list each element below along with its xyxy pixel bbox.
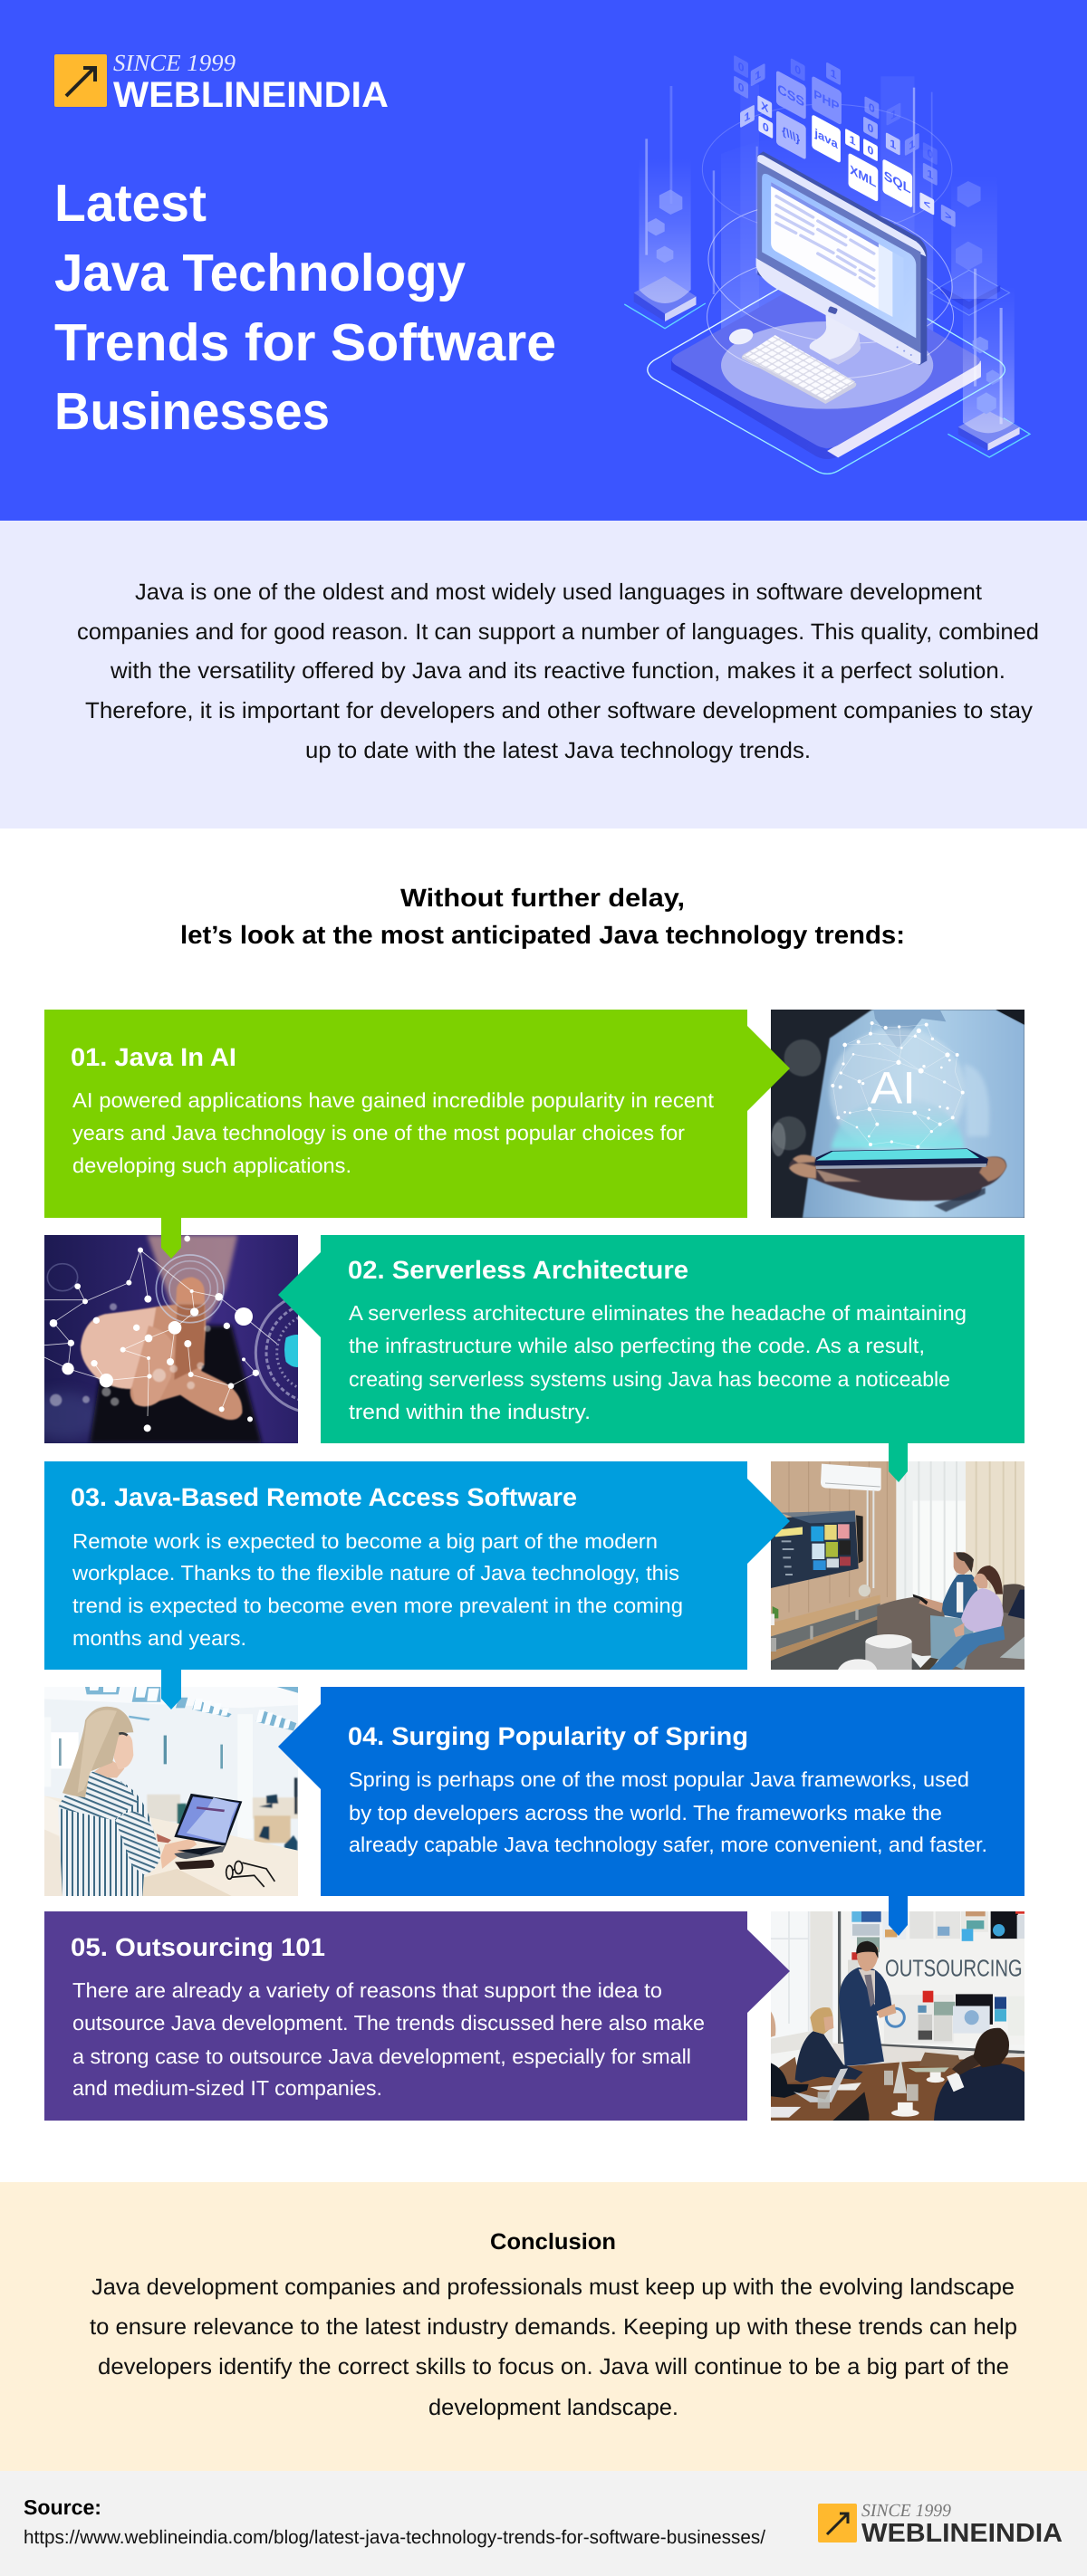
floating code tiles: CSS [777, 81, 804, 110]
panel: 01 Java In AI: developing such applications. [72, 1154, 351, 1177]
light rings [697, 104, 964, 378]
panel: 05 Outsourcing 101: outsource Java development. The trends discussed here also make [72, 2011, 705, 2035]
panel: 01 Java In AI: years and Java technology is one of the most popular choices for [72, 1121, 685, 1144]
intro text: Therefore, it is important for developers and other software development companies to stay [85, 698, 1034, 723]
floating code tiles: {\\\} [782, 124, 800, 146]
panel: 04 Surging Popularity of Spring: already capable Java technology safer, more convenient, and faster. [349, 1833, 987, 1856]
section heading: let’s look at the most anticipated Java technology trends: [180, 921, 905, 949]
title: Java Technology [54, 244, 466, 302]
title: Businesses [54, 382, 330, 441]
panel: 01 Java In AI: 01. Java In AI [71, 1043, 236, 1071]
floating code tiles: 1 [890, 107, 897, 122]
panel: conclusion: Java development companies and professionals must keep up with the evolving landscape [91, 2274, 1015, 2300]
floating code tiles: 0 [869, 100, 875, 116]
floating code tiles: 1 [745, 109, 750, 124]
panel: 04 Surging Popularity of Spring: by top developers across the world. The frameworks make the [349, 1801, 942, 1824]
panel: 04 Surging Popularity of Spring [278, 1687, 1024, 1936]
floating code tiles [734, 55, 956, 227]
floating code tiles: < [924, 196, 930, 212]
floating code tiles: java [814, 126, 838, 151]
logo: Webline India [54, 50, 389, 115]
platform outline [648, 288, 1005, 474]
panel: 02 Serverless Architecture: A serverless architecture eliminates the headache of maintaining [349, 1301, 967, 1325]
platform [671, 279, 981, 459]
panel: 05 Outsourcing 101: a strong case to outsource Java development, especially for small [72, 2045, 691, 2068]
floating code tiles: 1 [755, 67, 761, 83]
panel: 03 Java-Based Remote Access Software: workplace. Thanks to the flexible nature of Java technology, this [72, 1561, 679, 1585]
floating code tiles: 0 [868, 142, 873, 158]
photo: outsourcing business meeting [771, 1911, 1024, 2121]
panel: conclusion: to ensure relevance to the latest industry demands. Keeping up with these trends can help [90, 2314, 1017, 2340]
title [54, 174, 556, 441]
large glass column behind the monitor [721, 133, 933, 409]
intro text: companies and for good reason. It can support a number of languages. This quality, combined [77, 619, 1039, 645]
floating code tiles: 0 [927, 146, 933, 161]
panel: 01 Java In AI [44, 1010, 790, 1259]
floating code tiles: 0 [738, 59, 745, 74]
title: Latest [54, 174, 207, 233]
photo: couple watching smart TV [771, 1461, 1024, 1670]
panel: 02 Serverless Architecture: trend within the industry. [349, 1400, 591, 1423]
panel: 03 Java-Based Remote Access Software: 03. Java-Based Remote Access Software [71, 1483, 577, 1511]
panel: 03 Java-Based Remote Access Software: Remote work is expected to become a big part of the modern [72, 1529, 658, 1553]
section heading: Without further delay, [400, 884, 685, 912]
panel: 04 Surging Popularity of Spring: 04. Surging Popularity of Spring [348, 1722, 748, 1750]
panel: conclusion: development landscape. [428, 2395, 678, 2420]
intro text: with the versatility offered by Java and its reactive function, makes it a perfect solution. [110, 658, 1005, 684]
logo: Webline India: SINCE 1999 [113, 50, 236, 76]
front right pylon [948, 269, 1030, 457]
panel: 02 Serverless Architecture [278, 1235, 1024, 1482]
photo: hand holding tablet with AI hologram [771, 1010, 1024, 1218]
panel: 02 Serverless Architecture: the infrastructure while also perfecting the code. As a result, [349, 1334, 925, 1357]
footer logo: SINCE 1999 [861, 2501, 951, 2521]
panel: conclusion: Conclusion [490, 2229, 616, 2255]
intro text [77, 579, 1039, 763]
panel: 03 Java-Based Remote Access Software: months and years. [72, 1626, 246, 1650]
floating code tiles: PHP [813, 87, 840, 114]
panel: 03 Java-Based Remote Access Software [44, 1461, 790, 1709]
photo: hand holding tablet with AI hologram: AI [871, 1062, 916, 1113]
panel: 02 Serverless Architecture: 02. Serverless Architecture [348, 1256, 688, 1284]
floating code tiles: 1 [927, 167, 933, 182]
floating code tiles: 1 [890, 136, 896, 152]
section heading [180, 884, 905, 949]
footer logo: WEBLINEINDIA [861, 2519, 1063, 2548]
title: Trends for Software [54, 313, 556, 372]
panel: 04 Surging Popularity of Spring: Spring is perhaps one of the most popular Java frameworks, used [349, 1767, 969, 1791]
monitor stand [810, 312, 861, 365]
photo: finger touching network [24, 1235, 377, 1443]
floating code tiles: XML [850, 163, 876, 190]
panel: footer source [0, 2471, 1087, 2576]
mouse [727, 326, 755, 347]
panel: footer source: https://www.weblineindia.com/blog/latest-java-technology-trends-for-software-businesses/ [24, 2527, 765, 2548]
panel: conclusion [0, 2182, 1087, 2471]
panel: 05 Outsourcing 101: There are already a variety of reasons that support the idea to [72, 1978, 662, 2002]
left pylon [624, 86, 706, 329]
keyboard [742, 335, 856, 404]
floating code tiles: 0 [763, 120, 769, 135]
panel: 02 Serverless Architecture: creating serverless systems using Java has become a noticeable [349, 1367, 950, 1391]
floating code tiles: 0 [868, 120, 873, 136]
panel: conclusion: developers identify the correct skills to focus on. Java will continue to be a big part of the [98, 2354, 1009, 2380]
back right pylon [930, 175, 1010, 315]
photo: woman working on laptop [44, 1687, 298, 1896]
floating code tiles: 1 [909, 137, 915, 152]
floating code tiles: X [761, 99, 768, 115]
footer logo [818, 2501, 1063, 2548]
floating code tiles: 0 [794, 62, 801, 78]
floating code tiles: SQL [884, 168, 910, 196]
panel: 05 Outsourcing 101: and medium-sized IT companies. [72, 2076, 382, 2100]
intro text: up to date with the latest Java technology trends. [305, 738, 811, 763]
floating code tiles: 1 [831, 66, 836, 81]
panel: 05 Outsourcing 101: 05. Outsourcing 101 [71, 1933, 325, 1961]
panel: 01 Java In AI: AI powered applications have gained incredible popularity in recent [72, 1088, 715, 1112]
floating code tiles: > [945, 208, 951, 224]
floating code tiles: 1 [850, 132, 855, 148]
panel: 05 Outsourcing 101 [44, 1911, 790, 2121]
header band [0, 0, 1087, 521]
panel: 03 Java-Based Remote Access Software: trend is expected to become even more prevalent in the coming [72, 1594, 683, 1617]
monitor [756, 151, 927, 365]
intro text: Java is one of the oldest and most widely used languages in software development [135, 579, 982, 605]
logo: Webline India: WEBLINEINDIA [113, 75, 389, 115]
illustration: isometric computer with floating code tiles [624, 55, 1030, 474]
panel: footer source: Source: [24, 2495, 101, 2519]
intro band [0, 521, 1087, 828]
floating code tiles: 0 [738, 80, 745, 95]
